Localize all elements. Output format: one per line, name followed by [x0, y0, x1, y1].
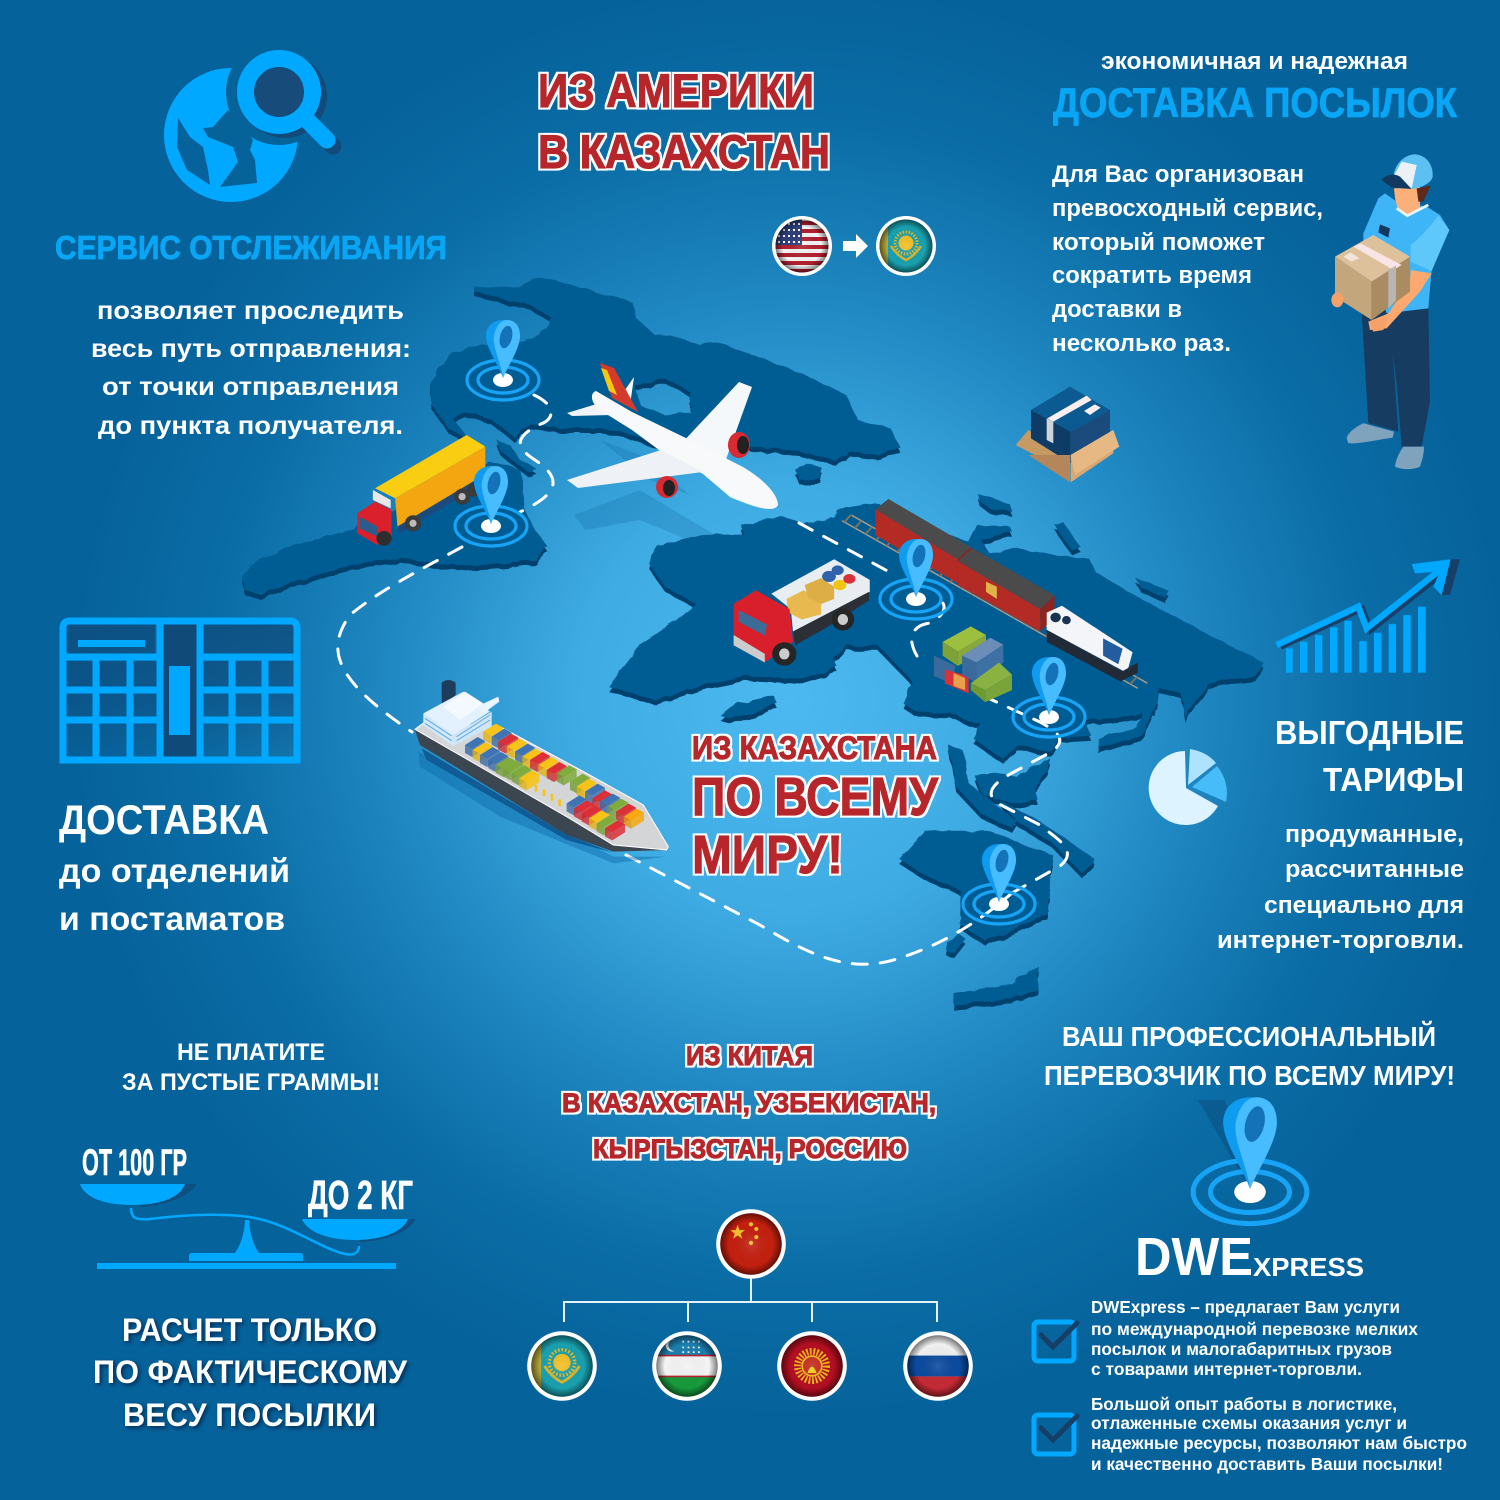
- text: company services: [1091, 1297, 1418, 1379]
- weight block: [80, 1039, 416, 1433]
- text: company experience: отлаженные схемы оказания услуг и: [1091, 1413, 1407, 1433]
- heading: no empty grams: [122, 1039, 380, 1096]
- route: Australia to Asia: [990, 699, 1067, 893]
- text: service description: несколько раз.: [1052, 330, 1231, 357]
- text: company experience: и качественно доставить Ваши посылки!: [1091, 1454, 1443, 1474]
- flag: Kyrgyzstan: [777, 1331, 847, 1401]
- tail: [567, 363, 638, 416]
- rail tracks: [842, 515, 1147, 688]
- text: tariffs description: [1217, 821, 1464, 954]
- carton front: [1028, 430, 1119, 482]
- heading: professional carrier: ВАШ ПРОФЕССИОНАЛЬНЫЙ: [1062, 1020, 1436, 1052]
- courier shirt: [1363, 193, 1449, 313]
- heading: tariffs: ТАРИФЫ: [1323, 761, 1464, 798]
- logo: DWExpress: XPRESS: [1253, 1252, 1364, 1282]
- heading: from China: КЫРГЫЗСТАН, РОССИЮ: [593, 1134, 907, 1164]
- heading: from China: [562, 1041, 936, 1164]
- connector lines: [564, 1278, 937, 1322]
- icon: pie chart: [1149, 749, 1227, 825]
- far engine: [728, 432, 750, 458]
- continent: South America: [243, 462, 548, 595]
- truck wheels: [772, 608, 854, 666]
- ship shadow: [418, 752, 667, 863]
- container stack: [934, 626, 1012, 702]
- text: to branches: до отделений: [59, 852, 290, 889]
- carton back flaps: [1016, 430, 1070, 470]
- pin: Eurasia: [880, 539, 952, 619]
- text: service description: доставки в: [1052, 296, 1182, 323]
- delivery to branches block: [59, 621, 297, 937]
- courier hands: [1331, 293, 1388, 332]
- dashed routes: [338, 395, 1067, 964]
- heading: from China: ИЗ КИТАЯ: [686, 1041, 813, 1071]
- route: Europe: [799, 523, 895, 575]
- heading line 2: ПО ВСЕМУ: [692, 767, 939, 827]
- text: actual weight: РАСЧЕТ ТОЛЬКО: [122, 1312, 377, 1348]
- cargo ship: [415, 680, 668, 863]
- islands: Southeast Asia: [949, 745, 1094, 873]
- continent: Australia: [899, 831, 1053, 941]
- tracking service block: [55, 39, 447, 440]
- blue container: [962, 638, 1003, 683]
- green container bottom: [971, 663, 1012, 702]
- text: tariffs description: продуманные,: [1285, 821, 1464, 848]
- red truck: [734, 559, 870, 666]
- text: service description: сократить время: [1052, 262, 1252, 289]
- icon: storage boxes grid: [63, 621, 297, 760]
- heading: from China: В КАЗАХСТАН, УЗБЕКИСТАН,: [562, 1088, 936, 1118]
- dark parcel: [1031, 387, 1110, 463]
- courier parcel: [1335, 257, 1372, 320]
- heading: tariffs: ВЫГОДНЫЕ: [1275, 714, 1464, 751]
- heading line 2: В КАЗАХСТАН: [538, 125, 830, 178]
- islands: Japan and Sakhalin: [1099, 687, 1159, 749]
- text: and parcel lockers: и постаматов: [59, 900, 285, 937]
- locomotive: [1047, 606, 1138, 681]
- pin: South America: [455, 466, 527, 546]
- courier arms: [1368, 270, 1432, 330]
- truck cargo crates: [786, 578, 834, 619]
- icon: open box: [1016, 387, 1119, 482]
- heading: no empty grams: НЕ ПЛАТИТЕ: [177, 1039, 325, 1066]
- world map: [243, 277, 1264, 1005]
- courier cap: [1393, 154, 1433, 189]
- text: actual weight: ПО ФАКТИЧЕСКОМУ: [93, 1354, 408, 1390]
- islands: Arctic: [977, 494, 1168, 599]
- ship superstructure: [423, 692, 499, 746]
- heading: professional carrier: [1044, 1020, 1455, 1091]
- pin: Australia: [963, 844, 1035, 924]
- yellow truck: [357, 435, 485, 546]
- wagon 1: [875, 499, 971, 583]
- near wing: [567, 450, 703, 488]
- text: tracking description: [91, 297, 411, 440]
- ship deck: [415, 723, 668, 850]
- truck cab: [734, 590, 793, 663]
- route: South America to ship: [338, 547, 462, 732]
- route: ship to Australia: [626, 855, 1012, 964]
- blue and red containers: [934, 656, 969, 694]
- truck chassis: [793, 592, 869, 645]
- icon: scales: [80, 1142, 416, 1269]
- ship funnel: [442, 680, 456, 707]
- text: tracking description: до пункта получателя.: [98, 412, 403, 440]
- flag: Russia: [903, 1331, 973, 1401]
- truck trailer: [375, 435, 485, 498]
- far wing: [680, 382, 752, 462]
- islands: New Zealand: [953, 966, 1038, 1005]
- tariffs block: [1149, 559, 1464, 954]
- text: company services: по международной перевозке мелких: [1091, 1319, 1418, 1339]
- truck cab: [357, 502, 392, 545]
- continents: [243, 277, 1264, 1005]
- text: tracking description: весь путь отправления:: [91, 335, 411, 363]
- heading line 1: ИЗ КАЗАХСТАНА: [692, 730, 937, 766]
- logo pin shadow: [1198, 1100, 1250, 1190]
- scale label: from 100 g: ОТ 100 ГР: [82, 1142, 187, 1183]
- icon: growth chart: [1277, 559, 1460, 673]
- courier with box: [1331, 154, 1449, 469]
- island: Tasmania: [946, 933, 966, 954]
- text: tracking description: позволяет проследить: [97, 297, 404, 325]
- plane: [567, 363, 778, 509]
- flag: USA: [772, 216, 832, 276]
- flags: USA to Kazakhstan: [772, 216, 936, 276]
- train: [842, 499, 1147, 688]
- parcel delivery block: [1052, 48, 1457, 469]
- truck bed: [771, 559, 870, 632]
- text: company services: с товарами интернет-торговли.: [1091, 1359, 1362, 1379]
- heading: tariffs: [1275, 714, 1464, 798]
- pin: North America: [467, 320, 539, 400]
- plane shadow: [574, 440, 715, 545]
- text: company experience: Большой опыт работы в логистике,: [1091, 1394, 1397, 1414]
- logo: DWExpress: DWE: [1135, 1227, 1253, 1287]
- text: actual weight: [93, 1312, 408, 1433]
- logo: DWExpress: [1135, 1227, 1364, 1287]
- islands: Caribbean: [497, 440, 536, 472]
- flag: Kazakhstan: [527, 1331, 597, 1401]
- icon: globe with magnifier: [164, 39, 333, 202]
- company block: [1034, 1020, 1467, 1474]
- text: service description: который поможет: [1052, 229, 1265, 256]
- text: company experience: надежные ресурсы, позволяют нам быстро: [1091, 1433, 1467, 1453]
- heading line 3: МИРУ!: [692, 825, 843, 885]
- flag: China: [716, 1209, 786, 1279]
- text: service description: Для Вас организован: [1052, 161, 1304, 188]
- heading: professional carrier: ПЕРЕВОЗЧИК ПО ВСЕМУ МИРУ!: [1044, 1060, 1455, 1091]
- text: tariffs description: интернет-торговли.: [1217, 927, 1464, 954]
- icon: checkbox 1: [1034, 1322, 1077, 1361]
- scale label: up to 2 kg: ДО 2 КГ: [308, 1172, 413, 1218]
- heading: tracking service: СЕРВИС ОТСЛЕЖИВАНИЯ: [55, 229, 447, 266]
- title: from America to Kazakhstan: [538, 64, 830, 178]
- island: Madagascar: [719, 695, 776, 719]
- route: Asia inland: [912, 595, 944, 656]
- text: service description: превосходный сервис,: [1052, 195, 1323, 222]
- logo pin: [1193, 1097, 1307, 1224]
- arrow: [843, 234, 868, 258]
- island: Iceland: [795, 463, 822, 480]
- text: service description: [1052, 161, 1323, 357]
- heading line 1: ИЗ АМЕРИКИ: [538, 64, 814, 117]
- heading: no empty grams: ЗА ПУСТЫЕ ГРАММЫ!: [122, 1069, 380, 1096]
- courier head: [1394, 187, 1420, 215]
- continent: North America: [431, 277, 900, 460]
- text: actual weight: ВЕСУ ПОСЫЛКИ: [123, 1397, 376, 1433]
- fuselage: [592, 391, 778, 509]
- pin: East Asia: [1013, 657, 1085, 737]
- text: company services: посылок и малогабаритных грузов: [1091, 1339, 1392, 1359]
- ship hull: [415, 729, 668, 852]
- flag: Uzbekistan: [652, 1331, 722, 1401]
- title: from Kazakhstan worldwide: [692, 730, 939, 885]
- icon: checkbox 2: [1034, 1415, 1077, 1454]
- courier legs: [1362, 305, 1430, 447]
- truck barrels: [822, 565, 855, 590]
- flag: Kazakhstan: [876, 216, 936, 276]
- courier shoes: [1347, 423, 1394, 443]
- ship containers: [465, 724, 644, 840]
- text: company experience: [1091, 1394, 1467, 1474]
- continents: Africa and Eurasia: [609, 502, 1264, 759]
- subheading: экономичная и надежная: [1101, 48, 1408, 75]
- from China block: [527, 1041, 973, 1401]
- text: company services: DWExpress – предлагает Вам услуги: [1091, 1297, 1400, 1317]
- route: North America to South America: [520, 395, 553, 512]
- text: tracking description: от точки отправления: [102, 373, 399, 401]
- text: tariffs description: рассчитанные: [1285, 856, 1464, 883]
- text: tariffs description: специально для: [1264, 892, 1464, 919]
- near engine: [656, 476, 678, 498]
- heading: delivery: ДОСТАВКА: [59, 796, 269, 843]
- green container top: [943, 626, 986, 666]
- wagon 2: [958, 548, 1055, 632]
